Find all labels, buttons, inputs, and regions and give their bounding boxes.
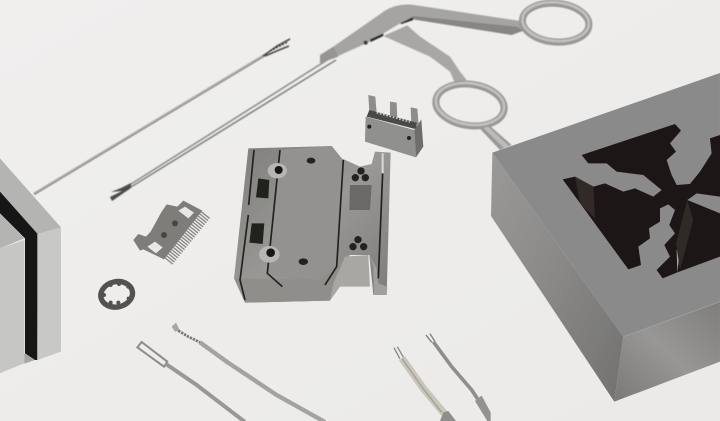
blade windows bbox=[178, 207, 194, 218]
teeth bbox=[367, 110, 417, 129]
left metal block bbox=[0, 158, 61, 373]
black slot bbox=[0, 192, 38, 360]
round counterbores bbox=[268, 163, 287, 178]
front face bbox=[365, 117, 416, 157]
edge highlight bbox=[623, 302, 720, 337]
thin wire D with spatula end bbox=[426, 334, 491, 421]
flat wire B with crimped tip bbox=[172, 323, 325, 421]
raised center face bbox=[268, 146, 342, 280]
toothed comb part bbox=[365, 95, 423, 157]
dark cut-out bbox=[563, 124, 720, 278]
flat wire A with open fork bbox=[137, 342, 245, 421]
large metal block with cut-out bbox=[491, 73, 720, 402]
block top face right bbox=[0, 158, 61, 234]
triple hole clusters bbox=[349, 167, 369, 250]
front face right bbox=[37, 227, 61, 360]
teeth bbox=[168, 215, 206, 262]
thin wire C bbox=[394, 347, 456, 421]
upper arm and ring bbox=[320, 0, 591, 63]
screw holes bbox=[307, 158, 315, 164]
long rod with grasper tip bbox=[34, 39, 290, 194]
slots bbox=[240, 150, 383, 300]
block left side face bbox=[491, 153, 623, 402]
front face left bbox=[0, 240, 24, 373]
rod bbox=[34, 55, 265, 194]
lower lip bbox=[24, 353, 35, 364]
block top face left bbox=[0, 213, 24, 248]
lower bevel bbox=[235, 255, 350, 303]
lower arm and ring bbox=[383, 25, 512, 150]
grasper tip bbox=[263, 39, 290, 56]
screw holes bbox=[367, 125, 371, 129]
comb blade plate bbox=[133, 201, 206, 262]
plate body bbox=[234, 146, 391, 303]
forceps instrument bbox=[110, 0, 591, 201]
block front face bbox=[614, 302, 720, 402]
block top face bbox=[492, 73, 720, 337]
step face bbox=[330, 255, 370, 301]
shaft jaw bbox=[110, 183, 131, 201]
prongs bbox=[368, 95, 377, 113]
inner wall highlights bbox=[575, 177, 595, 218]
rectangular windows bbox=[256, 178, 269, 198]
central machined plate bbox=[234, 146, 391, 303]
notched ring washer bbox=[98, 279, 135, 310]
shaft double rod bbox=[128, 55, 336, 187]
blade body bbox=[133, 201, 202, 259]
side face bbox=[414, 119, 423, 157]
light slot top bbox=[380, 153, 386, 173]
